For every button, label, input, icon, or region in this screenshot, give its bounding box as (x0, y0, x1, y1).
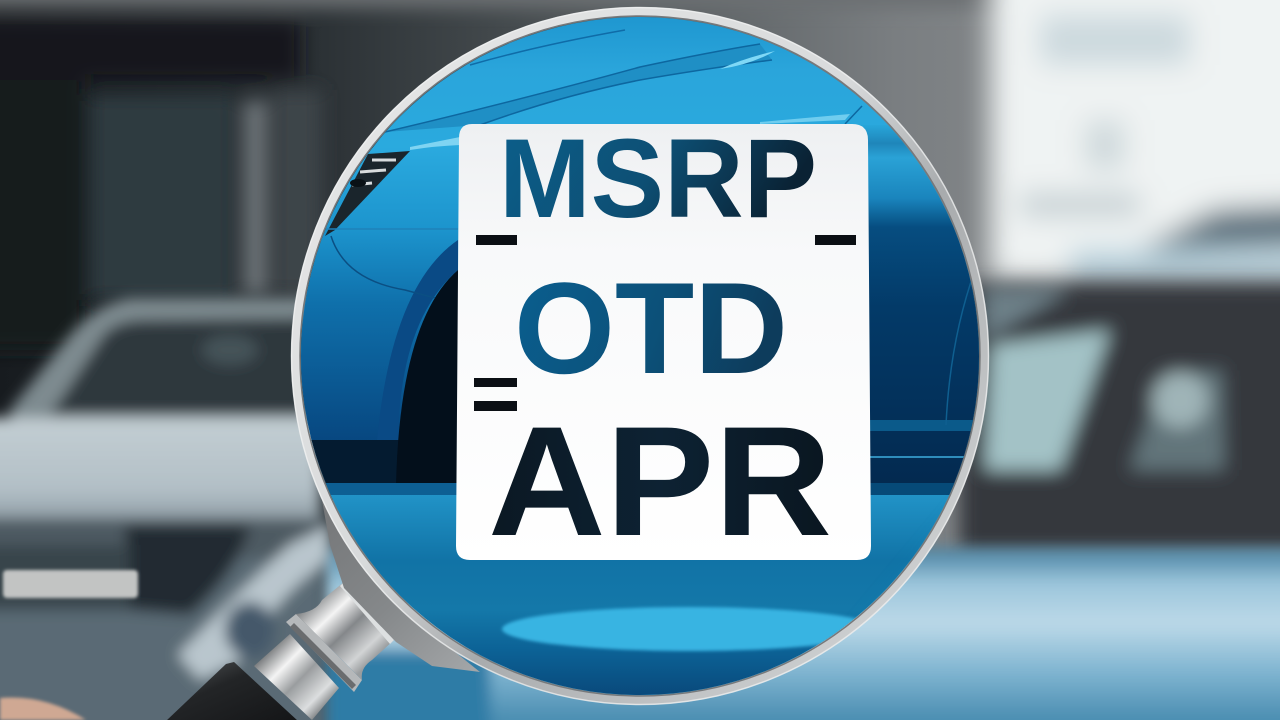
lens rim (292, 8, 988, 704)
lens bezel crescent (322, 500, 480, 672)
hand holding the magnifier (0, 697, 86, 720)
equals sign (474, 378, 517, 411)
lens: car close-up (290, 10, 1000, 720)
dash right (815, 235, 856, 245)
price label card (456, 116, 871, 569)
dash left (476, 235, 517, 245)
icon: magnifier handle (166, 582, 394, 720)
term: APR: APR (488, 395, 832, 569)
term: OTD: OTD (514, 255, 788, 401)
magnifying glass (166, 8, 1000, 720)
term: MSRP: MSRP (499, 116, 817, 241)
